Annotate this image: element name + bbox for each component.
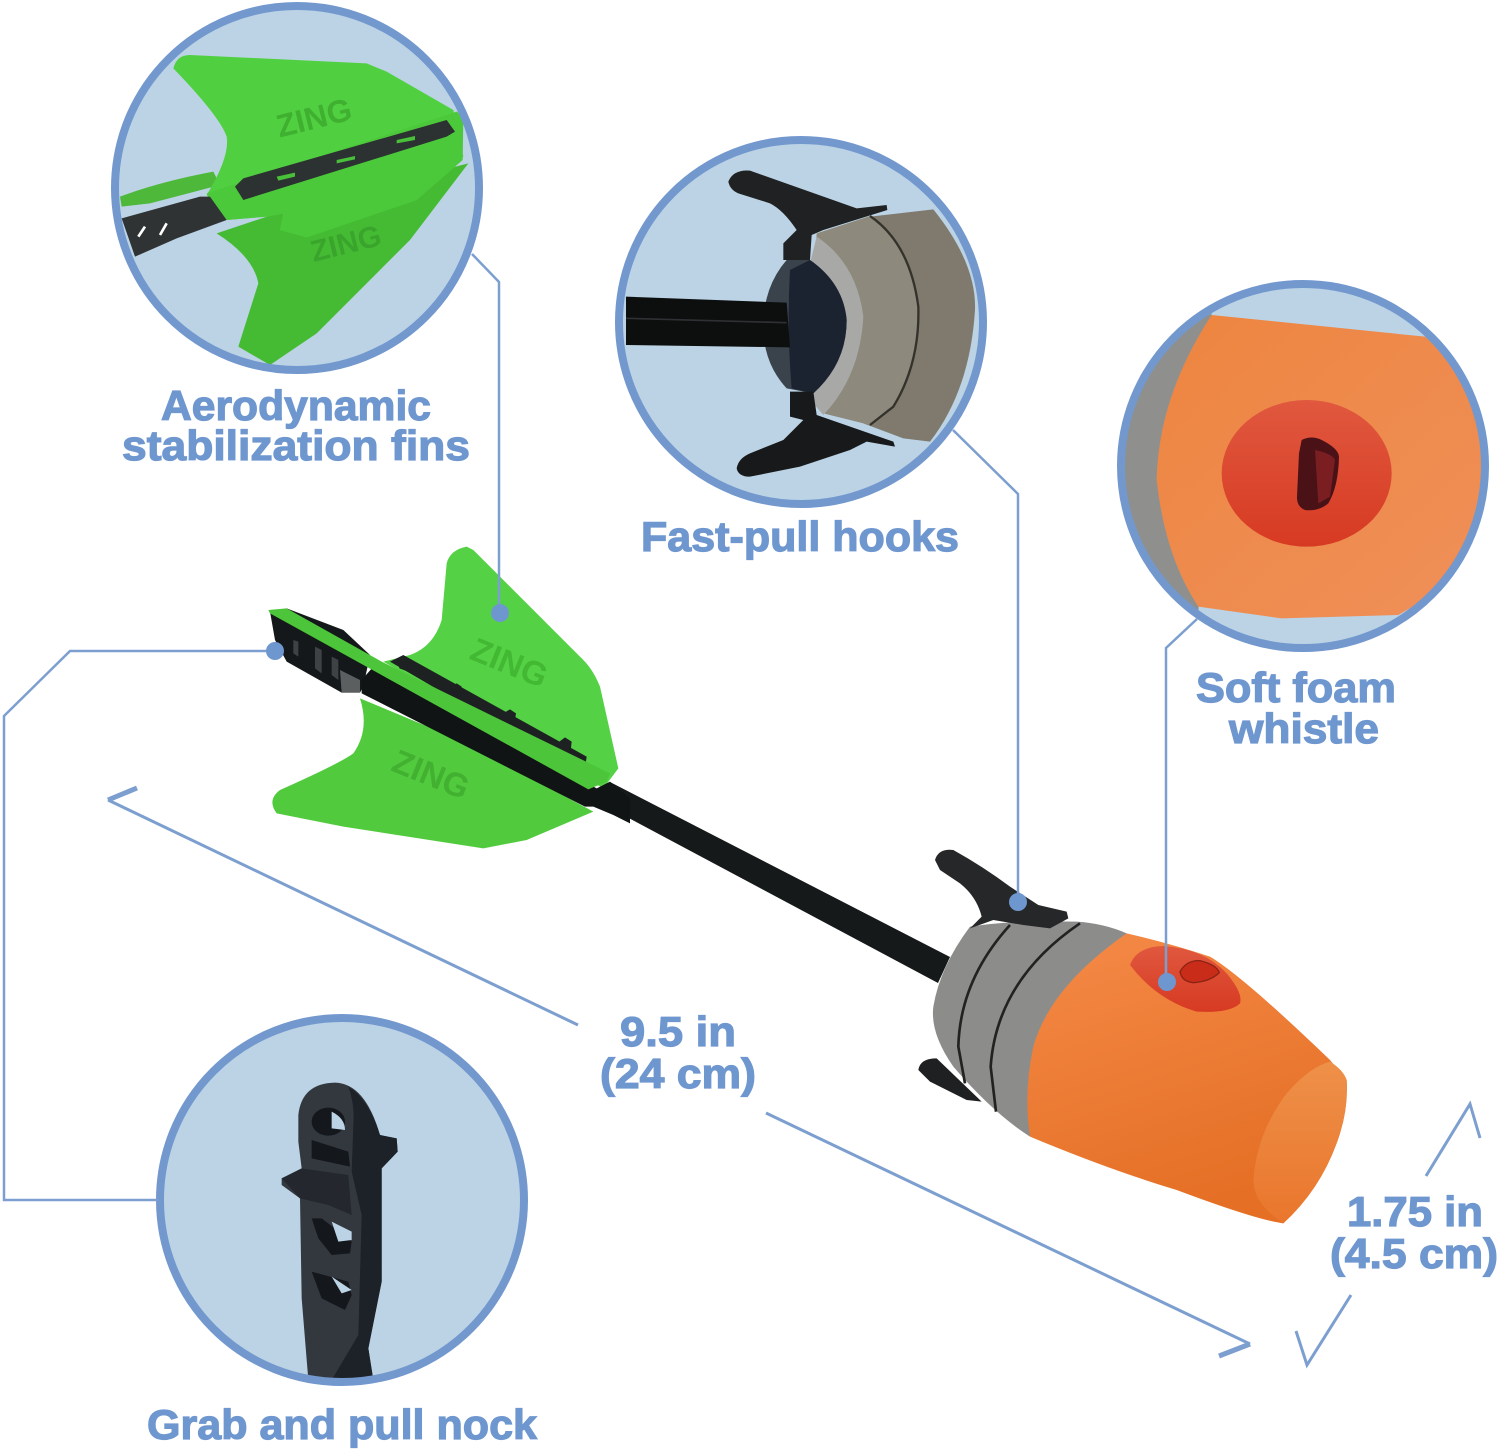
heading: whistle: whistle [1228,705,1379,752]
dimension label: length: 9.5 in [620,1008,736,1055]
teeth rail [390,655,587,768]
green rail [268,608,610,789]
band lines [958,923,1080,1112]
callout circle: nock [164,1022,520,1378]
callout circle: hooks [623,144,979,500]
shaft [595,782,950,983]
fins and nock: ZING [465,632,553,696]
callout circle: stabilization fins [119,10,475,366]
upper fin [383,547,618,788]
heading: nock: Grab and pull nock [147,1401,538,1448]
icon: orange foam with whistle [1115,313,1500,618]
grey band [933,921,1143,1137]
black under rail [362,667,630,823]
heading: fins: Aerodynamic [161,382,431,429]
icon: green fins close-up: ZING [273,91,355,144]
heading: hooks: Fast-pull hooks [641,513,959,560]
leader dots [266,604,1176,991]
icon: foam head with hooks [626,171,975,477]
dimension label: length: (24 cm) [600,1050,756,1097]
fins and nock [268,547,630,848]
callout circle: whistle [1125,288,1481,644]
nock [270,608,370,693]
heading: fins [122,382,470,469]
heading: whistle [1196,664,1396,752]
foam tip [1253,1062,1347,1223]
leader lines [4,254,1197,1200]
lower fin [272,698,593,848]
orange body [1027,933,1347,1223]
icon: green fins close-up [120,55,468,365]
dimension label: length [600,1008,756,1097]
dimension arrow: length [108,788,1250,1356]
dimension label: width: (4.5 cm) [1330,1230,1498,1277]
foam head [918,850,1347,1223]
heading: whistle: Soft foam [1196,664,1396,711]
whistle ring [1130,946,1241,1012]
dimension arrow: width [1296,1104,1480,1365]
top hook [935,850,1068,928]
product: arrow toy [268,547,1347,1223]
heading: fins: stabilization fins [122,422,470,469]
fins and nock: ZING [387,743,474,807]
lower hook [918,1058,982,1102]
whistle hole [1180,961,1219,983]
dimension label: width: 1.75 in [1347,1188,1483,1235]
dimension label: width [1330,1188,1498,1277]
icon: green fins close-up: ZING [307,219,385,269]
icon: black nock [282,1083,398,1380]
